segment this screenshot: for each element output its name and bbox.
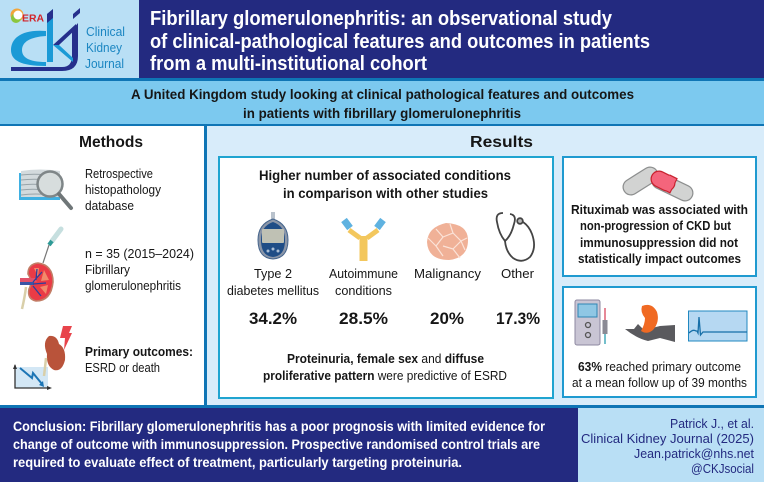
panel: citation: Jean.patrick@nhs.net	[634, 446, 754, 461]
panel: results	[207, 126, 764, 405]
label: autoimmune conditions: conditions	[335, 284, 392, 298]
icon: glucose meter	[258, 212, 288, 259]
icon: antibody	[344, 220, 383, 261]
panel: journal logo	[0, 0, 139, 78]
text: rituximab finding: statistically impact outcomes	[578, 251, 741, 266]
icon: CKJ monogram	[11, 8, 80, 71]
icon: kidney biopsy	[20, 229, 61, 309]
text: primary outcome finding: 63% reached primary outcome	[578, 360, 741, 374]
label: type 2 diabetes	[227, 267, 319, 298]
text: rituximab finding: non-progression of CKD but	[580, 218, 732, 233]
panel: citation: Clinical Kidney Journal (2025)	[581, 431, 754, 446]
text: primary outcomes: Primary outcomes:	[85, 345, 193, 359]
text: cohort size: glomerulonephritis	[85, 279, 181, 293]
text: retrospective database: Retrospective	[85, 167, 153, 181]
icon: hand holding kidney	[625, 305, 675, 342]
text: predictors of ESRD	[263, 352, 507, 383]
heading: methods: Methods	[79, 134, 143, 151]
title: of clinical-pathological features and outcomes in patients	[150, 31, 650, 53]
panel: associated conditions	[219, 157, 553, 398]
icon: ECG monitor	[688, 311, 747, 341]
panel: citation: Patrick J., et al.	[670, 416, 754, 431]
heading: results: Results	[470, 134, 533, 151]
text: rituximab finding	[571, 202, 748, 266]
heading: associated conditions: in comparison with other studies	[283, 185, 488, 201]
title: Fibrillary glomerulonephritis: an observational study	[150, 8, 613, 30]
text: cohort size: n = 35 (2015–2024)	[85, 247, 194, 261]
text: retrospective database: database	[85, 199, 134, 213]
value: diabetes share: 34.2%	[249, 309, 297, 328]
text: journal name: Kidney	[86, 40, 122, 55]
text: predictors of ESRD: Proteinuria, female sex and diffuse	[287, 352, 484, 366]
icon: kidney decline chart	[13, 326, 72, 390]
panel: citation	[578, 408, 764, 482]
text: journal name	[85, 24, 125, 71]
label: malignancy: Malignancy	[414, 267, 482, 281]
text: rituximab finding: immunosuppression did not	[580, 235, 739, 250]
text: primary outcome finding: at a mean follow up of 39 months	[572, 376, 747, 390]
text: cohort size: Fibrillary	[85, 263, 131, 277]
text: predictors of ESRD: proliferative pattern were predictive of ESRD	[263, 369, 507, 383]
icon: malignancy cell mass	[427, 223, 468, 260]
panel: subtitle band: A United Kingdom study looking at clinical pathological features and outcomes	[131, 87, 634, 102]
text: retrospective database	[85, 167, 162, 213]
text: primary outcomes: ESRD or death	[85, 361, 160, 375]
text: rituximab finding: Rituximab was associated with	[571, 202, 748, 217]
icon: dialysis machine	[575, 300, 608, 345]
label: type 2 diabetes: Type 2	[254, 267, 292, 281]
panel: subtitle band: in patients with fibrillary glomerulonephritis	[243, 106, 521, 121]
panel: citation: @CKJsocial	[691, 461, 754, 476]
panel: conclusion: Conclusion: Fibrillary glomerulonephritis has a poor prognosis with limited evidence for	[13, 419, 546, 434]
heading: associated conditions	[259, 167, 511, 201]
label: type 2 diabetes: diabetes mellitus	[227, 284, 319, 298]
icon: book and magnifier	[19, 170, 71, 208]
panel: rituximab	[563, 157, 756, 276]
label: autoimmune conditions: Autoimmune	[329, 267, 398, 281]
icon: capsule	[631, 175, 685, 193]
panel: subtitle band	[0, 81, 764, 124]
value: autoimmune share: 28.5%	[339, 309, 388, 328]
text: retrospective database: histopathology	[85, 183, 162, 197]
value: malignancy share: 20%	[430, 309, 464, 328]
value: other share: 17.3%	[496, 309, 540, 328]
text: primary outcomes	[85, 345, 193, 375]
text: cohort size	[85, 247, 194, 293]
title: from a multi-institutional cohort	[150, 53, 427, 75]
text: journal name: Clinical	[86, 24, 125, 39]
panel: conclusion: change of outcome with immunosuppression. Prospective randomised control trials are	[13, 437, 540, 452]
label: autoimmune conditions	[329, 267, 398, 298]
icon: ERA badge: ERA	[22, 14, 44, 24]
heading: associated conditions: Higher number of associated conditions	[259, 167, 511, 183]
label: other: Other	[501, 267, 534, 281]
panel: conclusion	[0, 408, 578, 482]
title	[150, 8, 650, 75]
text: journal name: Journal	[85, 56, 124, 71]
text: primary outcome finding	[572, 360, 747, 390]
panel: conclusion: required to evaluate effect of treatment, particularly targeting proteinuria.	[13, 455, 462, 470]
panel: methods	[0, 126, 204, 405]
panel: primary outcome	[563, 287, 756, 397]
panel: title banner	[139, 0, 764, 78]
icon: stethoscope	[497, 213, 534, 261]
